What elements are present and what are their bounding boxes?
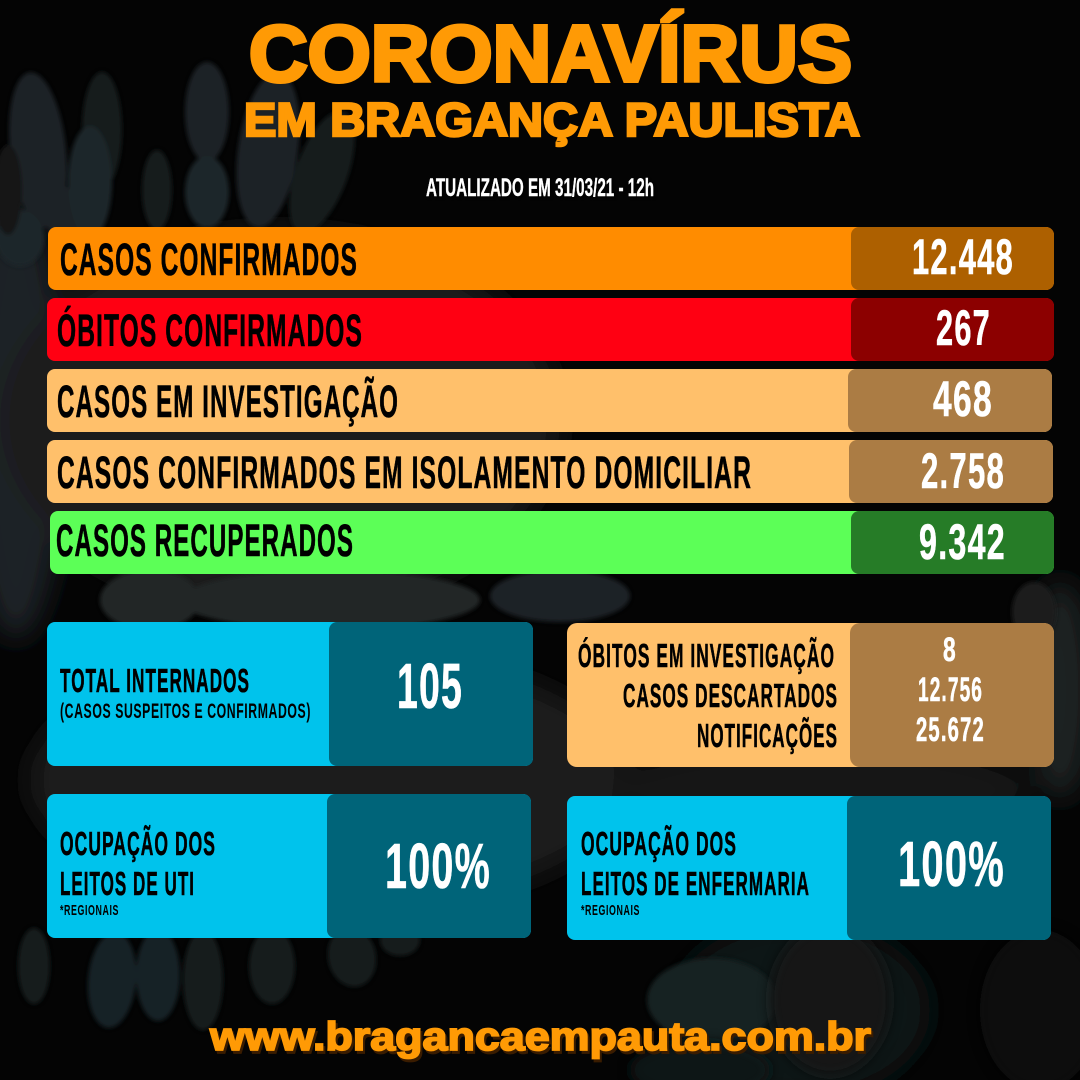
label: casos suspeitos e confirmados: (CASOS SUSPEITOS E CONFIRMADOS) [60, 700, 311, 723]
value: 9.342: 9.342 [919, 514, 1006, 570]
value: 468: 468 [933, 371, 993, 427]
footer: website: www.bragancaempauta.com.br [209, 1015, 871, 1059]
value: 8: 8 [943, 631, 957, 669]
panel: óbitos confirmados [47, 298, 1054, 361]
value: 12.448: 12.448 [912, 229, 1014, 285]
label: total internados: TOTAL INTERNADOS [60, 662, 250, 699]
update date: ATUALIZADO EM 31/03/21 - 12h [426, 174, 654, 202]
panel: casos em investigação [47, 369, 1052, 432]
value: 100%: 100% [385, 830, 491, 902]
value: 100%: 100% [898, 828, 1005, 900]
label: óbitos em investigação: ÓBITOS EM INVESTIGAÇÃO [578, 637, 835, 674]
label: ocupação dos: OCUPAÇÃO DOS [581, 825, 737, 862]
label: leitos de UTI: LEITOS DE UTI [60, 865, 195, 902]
note: regionais: *REGIONAIS [60, 902, 119, 919]
label: ocupação dos: OCUPAÇÃO DOS [60, 825, 216, 862]
label: casos descartados: CASOS DESCARTADOS [623, 677, 838, 714]
panel: casos confirmados [48, 227, 1054, 290]
note: regionais: *REGIONAIS [581, 902, 640, 919]
value: 2.758: 2.758 [921, 443, 1005, 499]
panel: isolamento domiciliar [47, 440, 1053, 503]
value: 12.756: 12.756 [918, 671, 983, 709]
value: 267: 267 [936, 300, 991, 356]
label: leitos de enfermaria: LEITOS DE ENFERMARIA [581, 865, 810, 902]
label: óbitos confirmados: ÓBITOS CONFIRMADOS [57, 305, 363, 356]
panel: total internados [47, 622, 533, 766]
label: casos em investigação: CASOS EM INVESTIGAÇÃO [57, 376, 399, 427]
panel: ocupação leitos de UTI [47, 794, 531, 938]
subtitle: Em Bragança Paulista: EM BRAGANÇA PAULISTA [244, 93, 860, 146]
value: 105: 105 [397, 650, 463, 722]
panel: óbitos, descartados, notificações [567, 623, 1054, 767]
value: 25.672: 25.672 [916, 711, 985, 749]
label: casos recuperados: CASOS RECUPERADOS [56, 515, 354, 566]
panel: ocupação leitos de enfermaria [567, 796, 1051, 940]
title: CORONAVÍRUS: CORONAVÍRUS [249, 9, 852, 98]
panel: casos recuperados [50, 511, 1054, 574]
label: casos confirmados: CASOS CONFIRMADOS [60, 234, 358, 285]
label: notificações: NOTIFICAÇÕES [697, 717, 838, 754]
